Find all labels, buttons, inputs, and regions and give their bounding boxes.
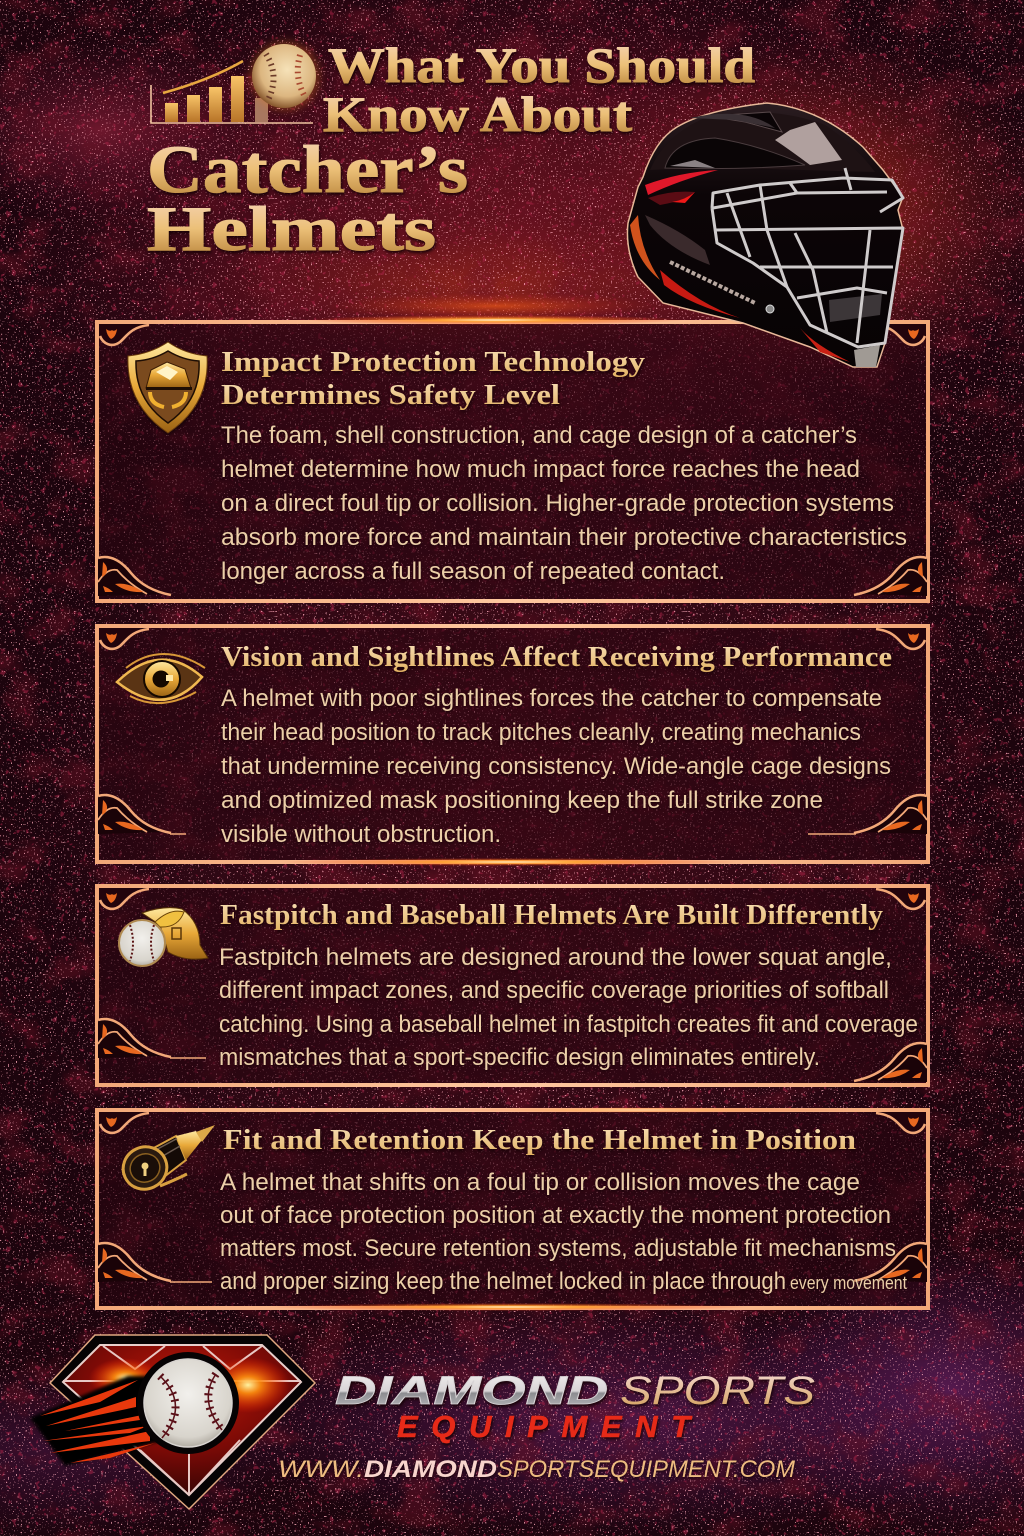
heading: impact protection xyxy=(221,347,645,411)
title xyxy=(147,37,755,264)
body text: vision: and optimized mask positioning keep the full strike zone xyxy=(221,787,823,814)
body text: vision: their head position to track pitches cleanly, creating mechanics xyxy=(221,719,861,746)
body text: impact protection xyxy=(221,422,907,585)
panel: fastpitch and baseball xyxy=(97,886,928,1085)
body text: impact protection: helmet determine how much impact force reaches the head xyxy=(221,456,860,483)
body text: vision xyxy=(221,685,891,848)
helmet illustration xyxy=(627,103,903,367)
brand name: SPORTS xyxy=(620,1369,815,1413)
body text: fastpitch xyxy=(219,944,918,1071)
body text: fastpitch: mismatches that a sport-specific design eliminates entirely. xyxy=(219,1044,820,1071)
body text: fastpitch: catching. Using a baseball helmet in fastpitch creates fit and coverage xyxy=(219,1011,918,1038)
icon: helmet and ball xyxy=(119,908,208,966)
icon: bar chart with baseball xyxy=(151,41,320,123)
website url: SPORTSEQUIPMENT.COM xyxy=(497,1456,795,1483)
title: Catcher’s xyxy=(147,131,468,207)
title: What You Should xyxy=(328,37,755,93)
body text: fit and retention: out of face protection position at exactly the moment protection xyxy=(220,1202,891,1229)
logo: diamond with baseball xyxy=(30,1335,315,1509)
icon: retention buckle xyxy=(116,1125,215,1196)
icon: shield with helmet xyxy=(128,342,207,436)
body text: impact protection: longer across a full season of repeated contact. xyxy=(221,558,725,585)
title: Know About xyxy=(323,86,632,142)
brand name: DIAMOND xyxy=(335,1369,608,1413)
body text: vision: that undermine receiving consistency. Wide-angle cage designs xyxy=(221,753,891,780)
website url xyxy=(278,1456,795,1483)
body text: vision: visible without obstruction. xyxy=(221,821,501,848)
body text: fit and retention: and proper sizing keep the helmet locked in place through xyxy=(220,1268,786,1295)
heading: fit and retention: Fit and Retention Keep the Helmet in Position xyxy=(223,1125,856,1156)
body text: fastpitch: Fastpitch helmets are designed around the lower squat angle, xyxy=(219,944,892,971)
body text: fit and retention xyxy=(220,1169,907,1295)
heading: impact protection: Determines Safety Level xyxy=(221,380,560,411)
body text: impact protection: The foam, shell construction, and cage design of a catcher’s xyxy=(221,422,857,449)
heading: vision: Vision and Sightlines Affect Receiving Performance xyxy=(221,642,892,673)
body text: fit and retention: A helmet that shifts on a foul tip or collision moves the cage xyxy=(220,1169,860,1196)
body text: impact protection: absorb more force and maintain their protective characteristics xyxy=(221,524,907,551)
panel: fit and retention xyxy=(97,1107,928,1311)
heading: fastpitch: Fastpitch and Baseball Helmets Are Built Differently xyxy=(220,900,883,931)
body text: fit and retention: every movement xyxy=(790,1273,907,1293)
panel: impact protection xyxy=(97,292,928,601)
brand name: EQUIPMENT xyxy=(397,1409,693,1444)
body text: impact protection: on a direct foul tip or collision. Higher-grade protection systems xyxy=(221,490,894,517)
heading: impact protection: Impact Protection Technology xyxy=(221,347,645,378)
website url: WWW. xyxy=(278,1456,364,1483)
brand name xyxy=(335,1369,815,1444)
website url: DIAMOND xyxy=(364,1456,497,1483)
panel: vision and sightlines xyxy=(97,626,928,866)
icon: eye xyxy=(117,654,205,703)
body text: fit and retention: matters most. Secure retention systems, adjustable fit mechanisms xyxy=(220,1235,896,1262)
title: Helmets xyxy=(147,193,436,264)
body text: fastpitch: different impact zones, and specific coverage priorities of softball xyxy=(219,977,889,1004)
body text: vision: A helmet with poor sightlines forces the catcher to compensate xyxy=(221,685,882,712)
